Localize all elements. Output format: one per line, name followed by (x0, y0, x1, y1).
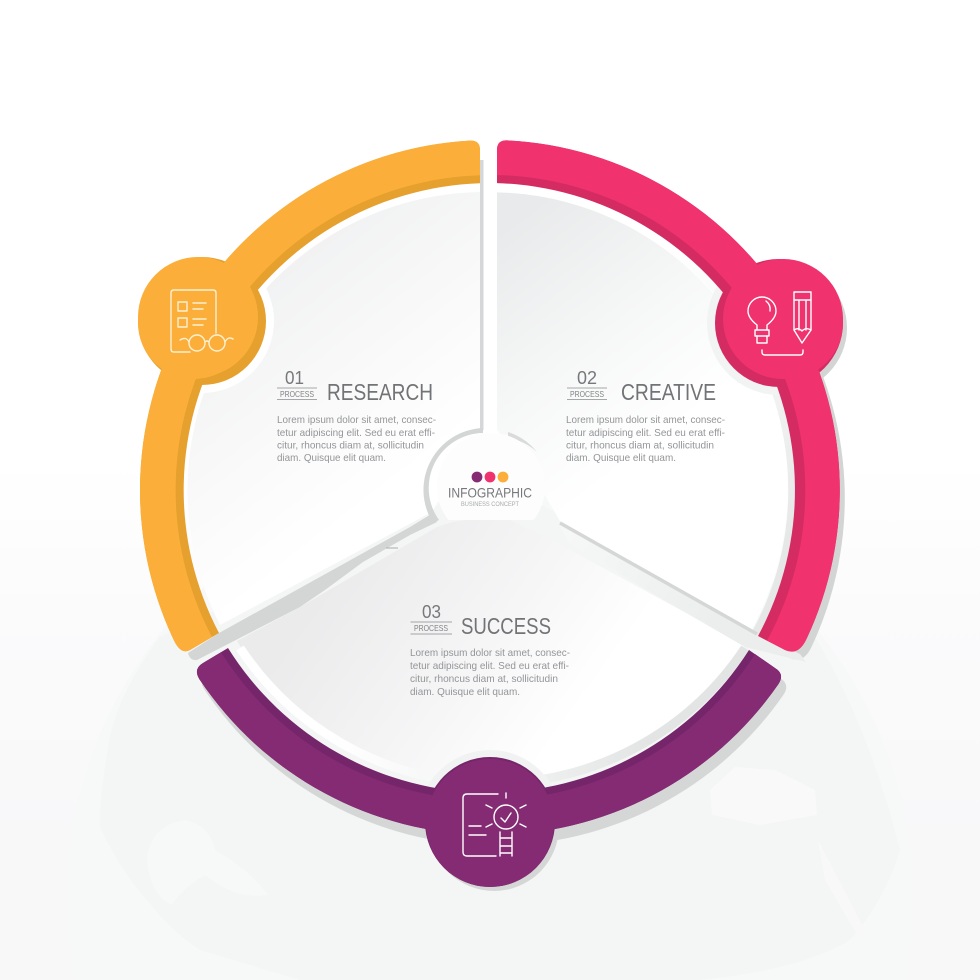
heading success: SUCCESS (461, 613, 551, 639)
text block: research (277, 368, 436, 464)
body creative: citur, rhoncus diam at, sollicitudin (566, 440, 714, 452)
hub disc (437, 433, 545, 520)
divider: left wedge shadow (188, 513, 437, 660)
icon: checklist and glasses (171, 290, 233, 352)
hub shadow arc left (423, 428, 483, 523)
number 01: 01 (285, 368, 304, 388)
shadow: pink segment (502, 148, 845, 660)
process label: PROCESS (414, 623, 448, 633)
text block: creative (566, 368, 725, 464)
body research: tetur adipiscing elit. Sed eu erat effi- (277, 428, 435, 439)
process label: PROCESS (570, 389, 604, 399)
body success: tetur adipiscing elit. Sed eu erat effi- (410, 661, 569, 672)
halo: success circle (440, 750, 546, 788)
hub dots (472, 472, 508, 482)
body research: citur, rhoncus diam at, sollicitudin (277, 440, 424, 452)
body success: citur, rhoncus diam at, sollicitudin (410, 674, 558, 685)
number 02: 02 (577, 368, 597, 388)
hub subtitle: BUSINESS CONCEPT (461, 501, 519, 508)
body success: Lorem ipsum dolor sit amet, consec- (410, 648, 570, 659)
globe watermark (67, 475, 913, 980)
heading research: RESEARCH (327, 379, 433, 405)
gap ring: creative (497, 188, 793, 642)
text block: success (410, 602, 570, 698)
number 03: 03 (422, 602, 441, 622)
segment: creative (pink) (497, 140, 843, 652)
body success (410, 648, 570, 698)
body success: diam. Quisque elit quam. (410, 687, 520, 698)
body research: Lorem ipsum dolor sit amet, consec- (277, 415, 436, 426)
body research: diam. Quisque elit quam. (277, 453, 386, 464)
body creative: diam. Quisque elit quam. (566, 453, 676, 464)
hub title: INFOGRAPHIC (448, 486, 532, 500)
panel: research (188, 192, 480, 625)
segment: success (purple) (197, 648, 781, 887)
heading creative: CREATIVE (621, 379, 716, 405)
divider: right wedge line (560, 523, 757, 634)
hub shadow arc right (508, 432, 537, 452)
halo: research circle (130, 249, 274, 393)
hub (423, 428, 545, 523)
panel: success (237, 519, 745, 785)
icon: bulb and pencil (748, 292, 811, 355)
divider: right wedge light strip (560, 525, 806, 662)
segment: research (yellow) (138, 141, 480, 651)
shadow: pink circle (719, 264, 847, 392)
gap ring: success (240, 648, 745, 784)
icon: document, bulb and ladder (463, 793, 526, 856)
body research (277, 415, 436, 464)
process label: PROCESS (280, 389, 314, 399)
body creative (566, 415, 725, 464)
shadow: purple segment (202, 658, 786, 846)
divider: vertical shadow (480, 160, 484, 430)
body creative: Lorem ipsum dolor sit amet, consec- (566, 415, 725, 426)
shadow: purple circle (429, 761, 559, 891)
halo: creative circle (708, 287, 772, 394)
body creative: tetur adipiscing elit. Sed eu erat effi- (566, 428, 725, 439)
infographic (100, 140, 900, 980)
small dash mark (386, 547, 398, 549)
panel: creative (497, 192, 787, 630)
